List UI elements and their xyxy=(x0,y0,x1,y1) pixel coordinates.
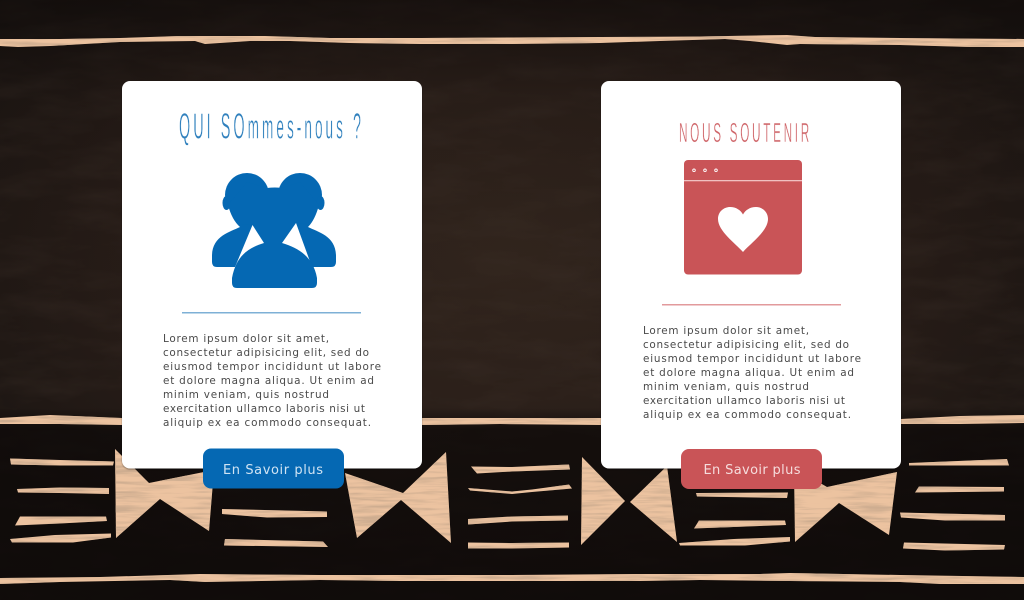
description text: exercitation ullamco laboris nisi ut xyxy=(643,395,845,407)
centre ribbons xyxy=(468,464,572,548)
description text: et dolore magna aliqua. Ut enim ad xyxy=(163,375,374,387)
description text: eiusmod tempor incididunt ut labore xyxy=(643,353,861,365)
heading: NOUS SOUTENIR xyxy=(679,117,812,149)
description text: aliquip ex ea commodo consequat. xyxy=(643,409,851,421)
divider xyxy=(662,304,841,306)
button xyxy=(681,449,822,489)
middle strip left xyxy=(0,415,122,425)
bowtie 1 xyxy=(115,449,214,538)
top horizontal strip xyxy=(0,35,1024,47)
right ribbons xyxy=(900,459,1009,550)
panel: qui sommes-nous xyxy=(122,81,422,488)
description text: eiusmod tempor incididunt ut labore xyxy=(163,361,381,373)
heading: QUI SOmmes-nous ? xyxy=(179,106,364,146)
divider xyxy=(182,312,361,314)
bowtie 3 xyxy=(581,457,625,545)
description text: minim veniam, quis nostrud xyxy=(163,389,329,401)
description text xyxy=(643,325,861,421)
centre-left ribbons xyxy=(222,509,328,547)
description text xyxy=(163,333,381,429)
card background xyxy=(601,81,901,468)
card background xyxy=(122,81,422,468)
panel: nous soutenir xyxy=(601,81,901,489)
button xyxy=(203,448,344,488)
description text: aliquip ex ea commodo consequat. xyxy=(163,417,371,429)
description text: et dolore magna aliqua. Ut enim ad xyxy=(643,367,854,379)
description text: exercitation ullamco laboris nisi ut xyxy=(163,403,365,415)
middle strip right xyxy=(901,415,1024,424)
bottom horizontal strip xyxy=(0,573,1024,584)
description text: Lorem ipsum dolor sit amet, xyxy=(163,333,329,345)
description text: consectetur adipisicing elit, sed do xyxy=(163,347,369,359)
centre-right ribbons xyxy=(679,492,790,546)
button: En Savoir plus xyxy=(704,463,801,478)
button: En Savoir plus xyxy=(223,463,323,478)
left ribbons xyxy=(10,458,114,542)
description text: Lorem ipsum dolor sit amet, xyxy=(643,325,809,337)
bowtie 4 xyxy=(794,468,897,542)
description text: consectetur adipisicing elit, sed do xyxy=(643,339,849,351)
middle strip centre xyxy=(422,418,601,425)
bowtie 3 right half xyxy=(630,466,677,542)
description text: minim veniam, quis nostrud xyxy=(643,381,809,393)
icon: group of people xyxy=(212,173,336,288)
icon: browser window with heart xyxy=(684,160,802,274)
bowtie 2 xyxy=(345,452,451,543)
